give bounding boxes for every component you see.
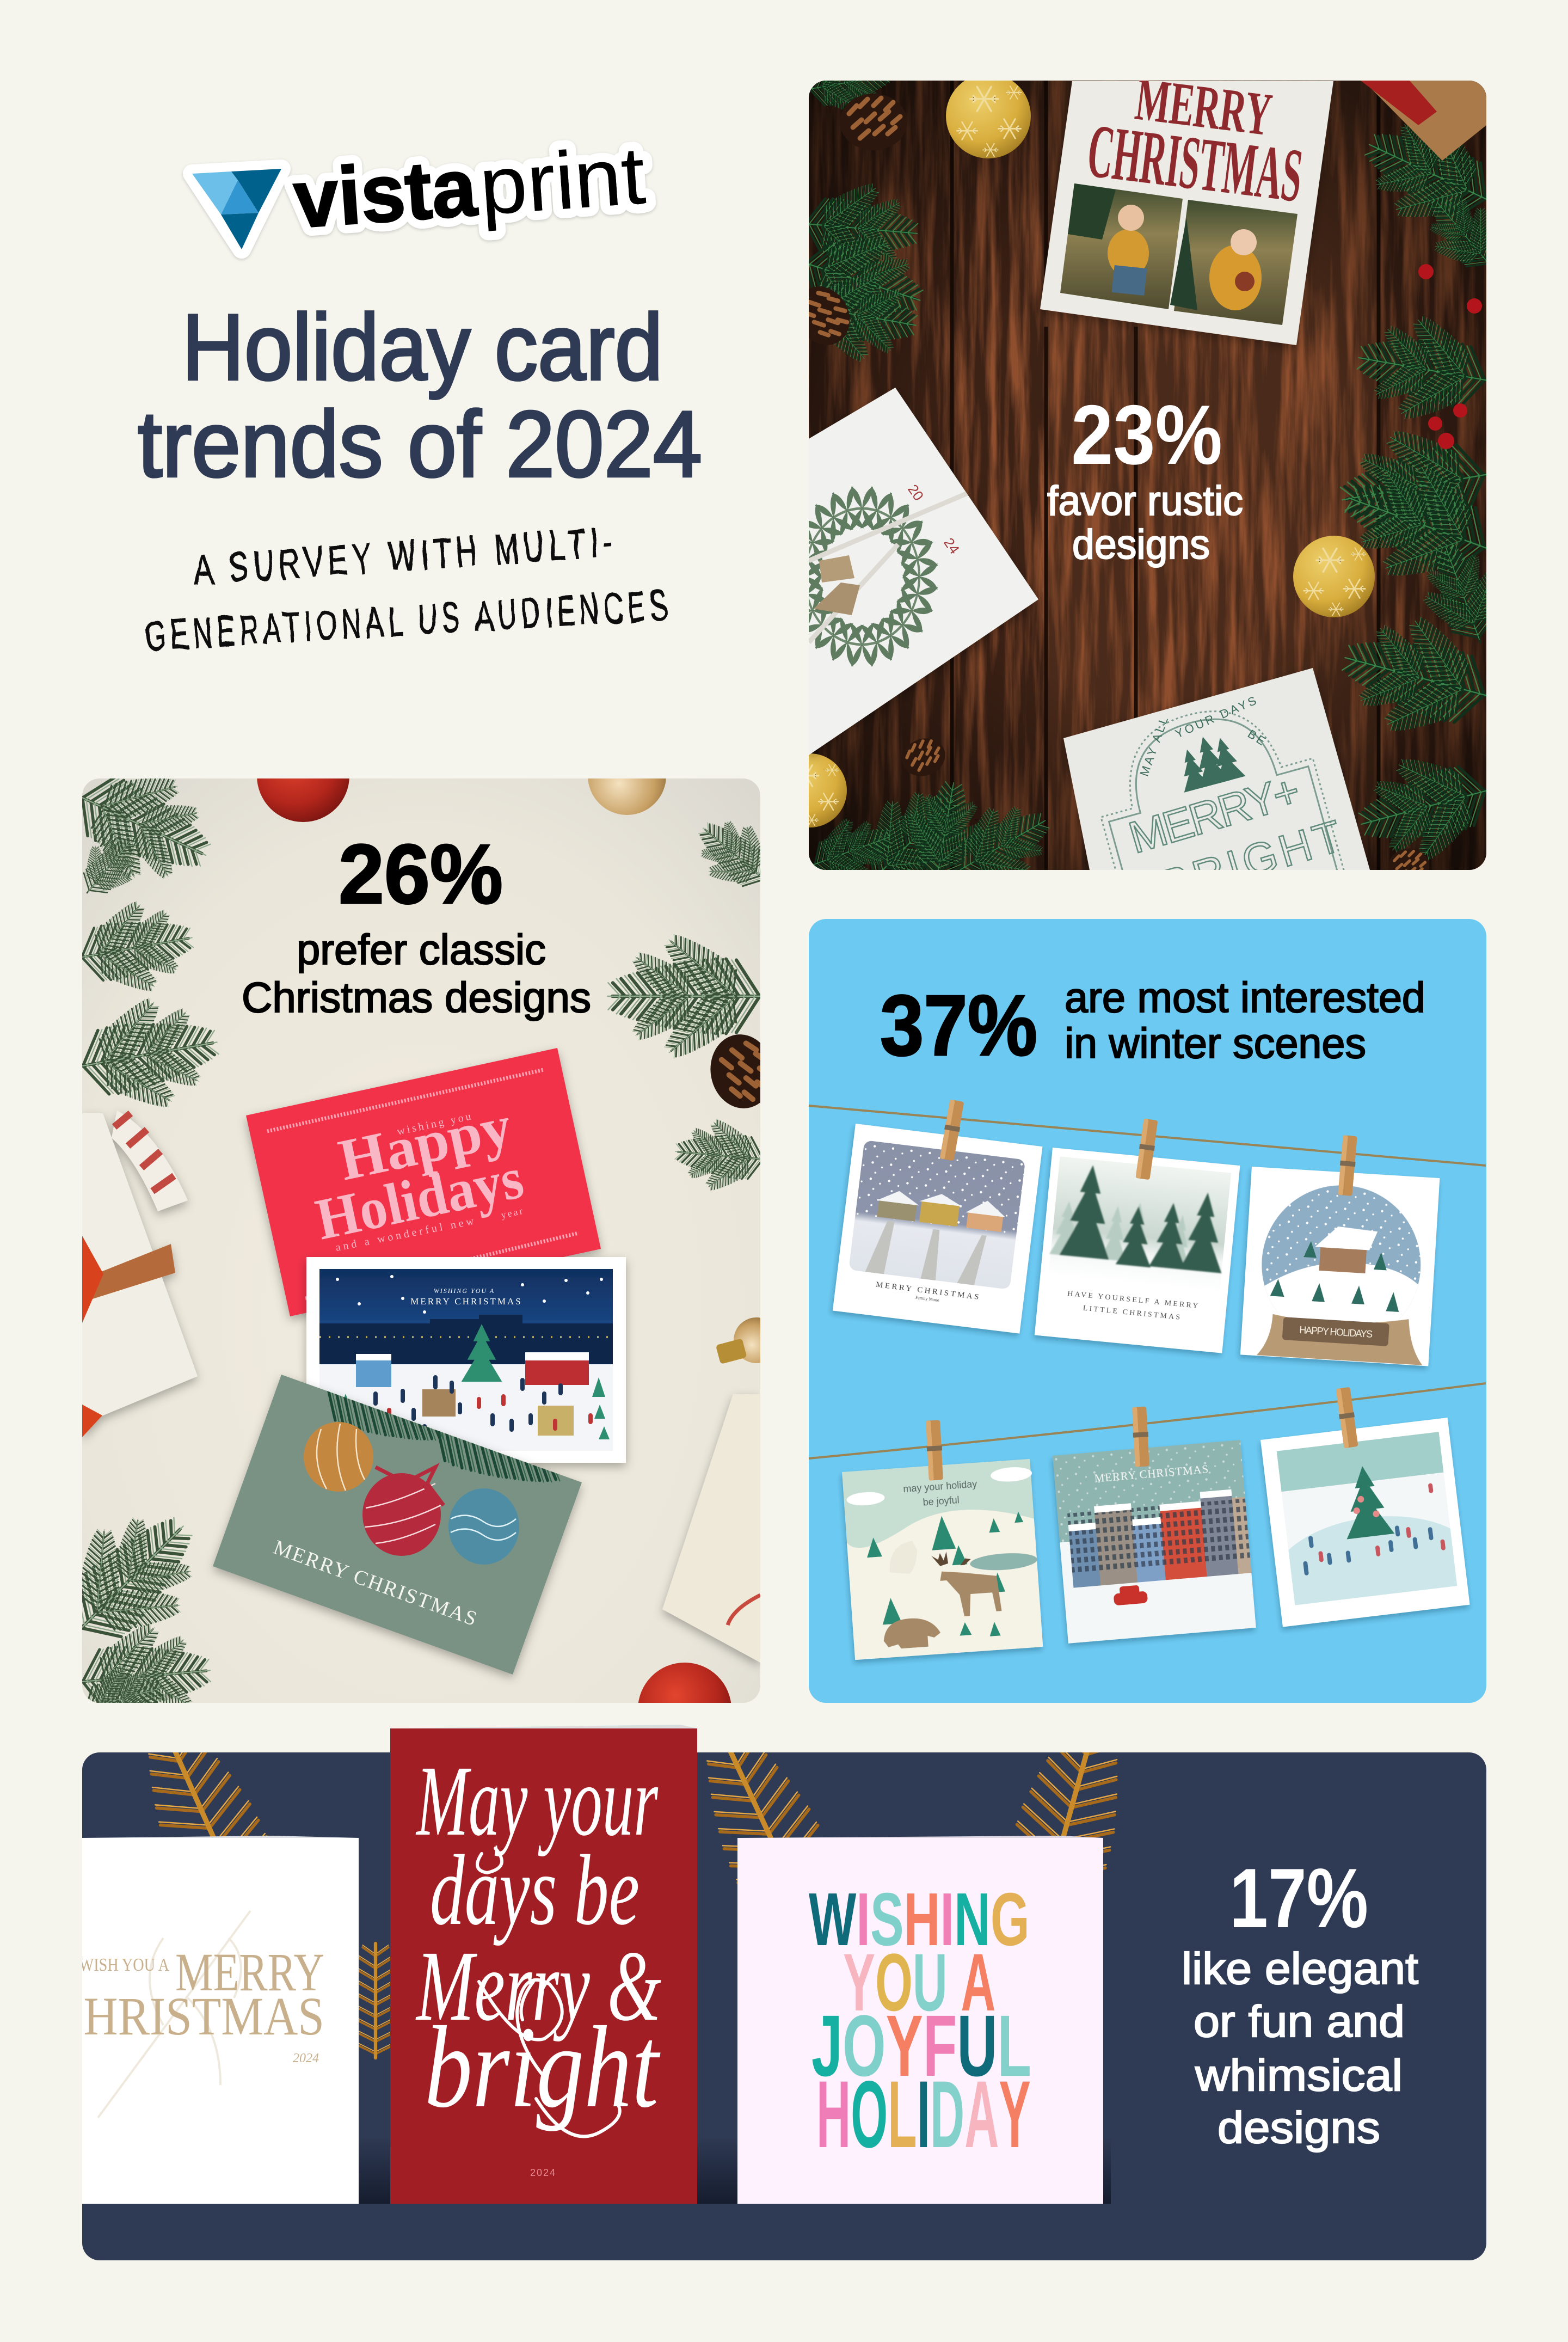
card text: LITTLE CHRISTMAS [1083,1304,1182,1322]
clothesline one [809,1106,1486,1166]
card text [410,1287,522,1307]
script lettering: bright [425,2002,661,2132]
clothespins [925,1099,1359,1481]
holly berries [1418,264,1482,449]
pine branches, left and bottom [783,38,1068,919]
card: merry christmas photo card: CHRISTMAS [1083,108,1307,218]
script lettering: Merry & [415,1930,661,2042]
gift box [1361,81,1486,161]
cream background [82,778,760,1703]
panel: winter scenes [809,919,1488,1703]
stat: 26% classic: prefer classic [297,925,546,973]
script lettering: May your [415,1745,659,1857]
logo: vistaprint sticker [192,129,648,249]
card year marks [905,481,963,557]
wood background [809,81,1486,870]
card: snowy houses [833,1124,1042,1334]
pine branches, right [1340,124,1486,861]
subtitle: handwritten note: A SURVEY WITH MULTI- [192,517,619,594]
gift box left [82,1111,198,1437]
card lettering [310,1094,529,1254]
card lettering: and a wonderful new [335,1215,477,1254]
card: misty pines [1035,1148,1240,1353]
card: snow globe: HAPPY HOLIDAYS [1299,1325,1373,1340]
card: watercolor baubles [213,1353,582,1675]
skaters [1302,1524,1434,1573]
title [138,295,702,496]
card: wishing you a joyful holiday [737,1836,1103,2204]
bells [819,555,854,583]
border stitching [267,1070,579,1298]
snow ground [319,1364,613,1451]
market stalls [356,1356,391,1387]
polar bear [888,1541,919,1575]
botanical outline [98,1911,250,2118]
logo wordmark: vista [291,141,480,245]
market visitors [376,1377,561,1433]
car [1114,1591,1148,1605]
card text: Family Name [915,1295,939,1303]
card heading: MERRY [1132,65,1275,149]
stat: 26% classic: 26% [339,827,503,921]
blue background [809,919,1486,1703]
card lettering: WE WISH YOU A [52,1955,169,1975]
card: merry christmas photo card [1040,65,1333,345]
pine branches [28,736,792,1746]
stat: 37% winter: are most interested [1065,973,1425,1021]
script swashes [477,1848,620,2136]
card text [903,1479,979,1509]
trees [1171,729,1245,793]
subtitle: handwritten note: GENERATIONAL US AUDIENCES [144,581,673,660]
card frame [1081,686,1361,991]
card photos [1060,183,1298,325]
card lettering: wishing you [396,1110,474,1138]
title: Holiday card [182,295,663,400]
card lettering: CHRISTMAS [52,1986,324,2046]
card: woodland animals [842,1459,1044,1660]
stat: 17% elegant or whimsical: 17% [1229,1851,1368,1945]
panel: classic Christmas designs [28,729,792,1756]
brown bear [882,1616,942,1650]
pinecones [786,94,1429,882]
stat: 17% elegant or whimsical: or fun and [1194,1997,1405,2046]
hanging pine [310,1353,576,1501]
card text: may your holiday [903,1479,977,1494]
card: wreath and bells [786,388,1038,755]
painted baubles [304,1422,519,1565]
night sky [319,1269,613,1323]
logo wordmark: print [477,129,648,232]
colorful lettering: HOLIDAY [816,2062,1031,2168]
card lettering [52,1942,324,2065]
card: merry and bright [1063,668,1370,991]
stat: 17% elegant or whimsical: like elegant [1182,1944,1418,1994]
card heading [1083,65,1307,218]
card year marks: 24 [940,535,963,557]
card: elegant merry christmas [52,1836,359,2204]
card lettering: Happy [333,1094,517,1193]
colorful lettering: YOU A [843,1938,995,2028]
logo wordmark [291,129,648,245]
card: may your days be merry and bright [390,1725,697,2204]
cabin [1319,1244,1367,1273]
stat: 26% classic [242,827,591,1021]
stat: 23% rustic: 23% [1071,388,1222,482]
pinecone [705,1029,779,1113]
card year marks: 20 [905,481,927,504]
script lettering [415,1745,661,2132]
logo wordmark: print [477,129,648,232]
card lettering: 2024 [293,2051,319,2065]
subtitle: handwritten note [144,517,673,660]
card text [1066,1290,1200,1323]
globe trees [1270,1239,1403,1312]
script lettering: days be [430,1835,640,1946]
Christmas tree [462,1324,502,1382]
card text: MERRY CHRISTMAS [410,1296,522,1307]
card text: MERRY CHRISTMAS [1094,1462,1209,1485]
card: skating rink [1252,1416,1488,1649]
globe base [1257,1310,1425,1365]
stat: 23% rustic: favor rustic [1047,478,1243,524]
header: logo, title and subtitle [138,129,702,660]
stat: 17% elegant or whimsical: designs [1217,2103,1380,2153]
card text: HAVE YOURSELF A MERRY [1067,1290,1200,1310]
card text: MERRY CHRISTMAS [875,1280,981,1302]
clothesline two [809,1383,1486,1458]
card lettering: Holidays [310,1145,529,1252]
card lettering: year [500,1205,525,1221]
card lettering: BRIGHT [1155,810,1351,912]
card: happy holidays [246,1048,601,1316]
stat: 37% winter [880,973,1425,1074]
card lettering: MERRY+ [1123,764,1310,863]
ribbon [809,493,969,642]
card lettering: MERRY [175,1942,324,2002]
arched motto [1123,686,1272,783]
small trees [864,1510,1031,1645]
year: 2024 [530,2167,556,2178]
wreath [786,486,938,667]
stat: 26% classic: Christmas designs [242,973,591,1021]
arched motto: MAY ALL [1137,713,1171,778]
stat: 37% winter: in winter scenes [1065,1019,1366,1067]
title: trends of 2024 [138,392,702,496]
panel: elegant and whimsical [52,1706,1486,2260]
baubles [773,65,1375,827]
colorful lettering: JOYFUL [811,1997,1031,2095]
stat: 23% rustic [1047,388,1243,568]
panel: rustic designs [809,81,1486,870]
buildings [1068,1526,1100,1588]
arched motto: YOUR DAYS [1173,692,1260,741]
stat: 37% winter: 37% [880,978,1037,1074]
icon: vistaprint V mark [192,169,281,249]
colorful lettering [809,1877,1031,2168]
stat: 17% elegant or whimsical: whimsical [1195,2051,1403,2100]
pond [969,1551,1038,1572]
card text: be joyful [923,1494,960,1508]
baubles [257,729,779,1756]
navy background with gold sprigs [82,1706,1486,2260]
card: Christmas market [306,1257,626,1463]
card text: WISHING YOU A [434,1287,495,1295]
decorated tree [1338,1463,1394,1540]
skyline [319,1315,613,1366]
card: town street [1053,1440,1256,1644]
arched motto: BE [1245,727,1270,749]
logo wordmark: vista [291,141,480,245]
card lettering [1123,757,1351,916]
card text: MERRY CHRISTMAS [270,1536,480,1630]
colorful lettering: WISHING [809,1877,1030,1961]
card: snow globe [1240,1167,1440,1366]
stat: 23% rustic: designs [1072,522,1210,568]
gift box right [662,1394,760,1663]
stat: 17% elegant or whimsical [1182,1851,1418,2153]
moose [939,1567,1002,1618]
